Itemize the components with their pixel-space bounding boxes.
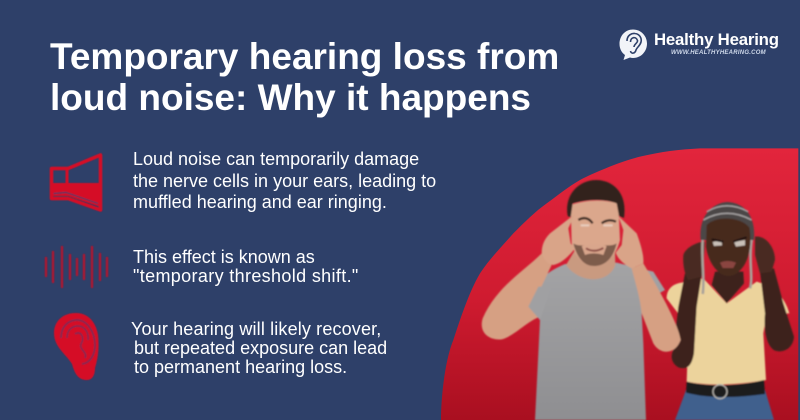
title: loud noise: Why it happens bbox=[50, 77, 531, 118]
title bbox=[50, 36, 559, 118]
man's right arm bbox=[632, 263, 681, 352]
text: nerve cell damage: muffled hearing and ear ringing. bbox=[133, 192, 387, 212]
text: temporary threshold shift bbox=[133, 247, 359, 286]
woman's braided hair bbox=[700, 202, 754, 240]
man's hair bbox=[567, 180, 625, 218]
text: nerve cell damage bbox=[133, 149, 436, 212]
woman's neck and chest bbox=[712, 272, 744, 303]
man's t-shirt bbox=[528, 263, 665, 420]
logo wordmark: Healthy Hearing bbox=[654, 30, 779, 49]
woman bbox=[667, 202, 794, 420]
woman's belt bbox=[686, 380, 765, 397]
icon: ear in speech bubble bbox=[620, 30, 647, 60]
woman's hands bbox=[683, 242, 705, 280]
man's right hand bbox=[616, 216, 643, 268]
woman's face bbox=[706, 219, 750, 276]
man's beard bbox=[573, 243, 617, 266]
logo url: WWW.HEALTHYHEARING.COM bbox=[671, 50, 766, 56]
text: nerve cell damage: the nerve cells in your ears, leading to bbox=[133, 170, 436, 190]
text: temporary threshold shift: This effect is known as bbox=[133, 247, 315, 267]
text: recovery and permanent loss: but repeated exposure can lead bbox=[134, 338, 387, 358]
man's head bbox=[571, 201, 620, 266]
man's left hand bbox=[542, 214, 575, 265]
woman's jeans bbox=[675, 390, 774, 420]
text: recovery and permanent loss bbox=[131, 319, 387, 377]
text: recovery and permanent loss: to permanent hearing loss. bbox=[134, 357, 347, 377]
red background arc bbox=[441, 148, 798, 420]
title: Temporary hearing loss from bbox=[50, 36, 559, 77]
text: temporary threshold shift: "temporary threshold shift." bbox=[133, 266, 359, 286]
man bbox=[482, 180, 681, 420]
man's eyes and brows bbox=[578, 218, 616, 223]
man's left arm bbox=[482, 253, 552, 339]
logo: Healthy Hearing bbox=[620, 30, 779, 60]
woman's top bbox=[667, 278, 789, 385]
text: recovery and permanent loss: Your hearing will likely recover, bbox=[131, 319, 381, 339]
man's left sleeve bbox=[528, 287, 552, 320]
text: nerve cell damage: Loud noise can temporarily damage bbox=[133, 149, 419, 169]
man's neck bbox=[566, 250, 615, 279]
woman's right arm bbox=[760, 268, 794, 351]
woman's left arm bbox=[672, 273, 702, 368]
